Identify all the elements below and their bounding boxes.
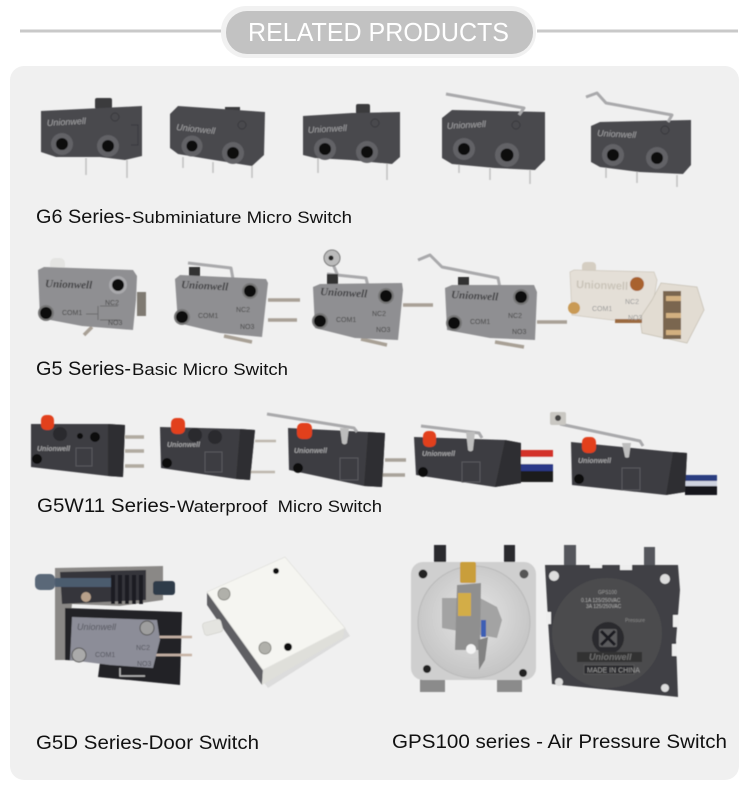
switch: G5 pin plunger: NC2: [105, 300, 119, 307]
switch: G5 roller lever: [312, 250, 433, 345]
switch: G5 pin plunger: COM1: [62, 310, 82, 317]
switch: G5W11 with wires: [414, 426, 553, 487]
switch: G5W11 roller lever with wires: [550, 412, 717, 495]
switch: G5W11 angled: [160, 418, 276, 480]
label: subminiature micro switch: Subminiature Micro Switch: [132, 208, 352, 227]
switch: G5 short lever: NC2: [236, 307, 250, 314]
switch: G6 straight lever: [442, 94, 545, 184]
product: G5D door switch mechanism: NO3: [137, 661, 152, 668]
switch: G6 solder terminals: Unionwell: [308, 123, 348, 135]
row: G5W11 series waterproof micro switches: [31, 412, 717, 495]
label: basic micro switch: Basic Micro Switch: [132, 360, 288, 379]
switch: G5 curved lever: NO3: [512, 329, 526, 336]
switch: G5W11 with wires: Unionwell: [422, 451, 456, 458]
switch: G5W11 roller lever with wires: Unionwell: [578, 458, 612, 465]
switch: G5 roller lever: NC2: [372, 311, 386, 318]
switch: G5 roller lever: COM1: [336, 317, 356, 324]
switch: G5 pin plunger: [38, 258, 146, 335]
switch: G5 short lever: COM1: [198, 313, 218, 320]
product: air pressure switch back: 3A 125/250VAC: [586, 604, 622, 610]
switch: G6 curved lever: Unionwell: [597, 128, 637, 140]
header: related products: [20, 6, 738, 58]
switch: G5 curved lever: COM1: [470, 319, 490, 326]
product: air pressure switch back: Pressure: [625, 618, 645, 624]
label: G5D series door switch: G5D Series-Door Switch: [36, 733, 259, 754]
switch: G5 white with connector: NO3: [628, 315, 642, 322]
product: G5D door switch mechanism: COM1: [95, 652, 115, 659]
switch: G5W11 angled: Unionwell: [167, 442, 201, 449]
switch: G5 pin plunger: NO3: [108, 320, 122, 327]
header: related products: RELATED PRODUCTS: [248, 17, 509, 47]
switch: G5 short lever: Unionwell: [181, 279, 229, 294]
label: GPS100 series air pressure switch: GPS100 series - Air Pressure Switch: [392, 732, 727, 753]
switch: G5 curved lever: [418, 255, 567, 347]
switch: G5W11 straight lever: Unionwell: [294, 448, 328, 455]
switch: G6 straight lever: Unionwell: [447, 119, 487, 131]
product: white door switch box: [202, 557, 350, 688]
label: waterproof micro switch: Waterproof Micro Switch: [177, 497, 382, 516]
switch: G5W11 plain: Unionwell: [37, 446, 71, 453]
switch: G5 white with connector: NC2: [625, 299, 639, 306]
product: G5D door switch mechanism: [35, 566, 192, 685]
switch: G5W11 plain: [31, 415, 144, 477]
switch: G6 angled: Unionwell: [176, 122, 217, 136]
switch: G5 roller lever: Unionwell: [320, 286, 368, 301]
switch: G5 roller lever: NO3: [376, 327, 390, 334]
row: G5 series basic micro switches: [38, 250, 704, 347]
switch: G6 plain actuator: [41, 98, 142, 178]
switch: G5 white with connector: Unionwell: [576, 279, 628, 293]
product: air pressure switch back: Unionwell: [589, 652, 632, 662]
label: G5 series: G5 Series-: [36, 359, 131, 380]
label: G5W11 series: G5W11 Series-: [37, 496, 176, 517]
switch: G5W11 straight lever: [267, 414, 406, 487]
product: G5D door switch mechanism: NC2: [136, 645, 150, 652]
product: air pressure switch back: MADE IN CHINA: [587, 668, 640, 674]
label: G6 series: G6 Series-: [36, 207, 131, 228]
product: air pressure switch back: [545, 545, 680, 697]
switch: G5 white with connector: COM1: [592, 306, 612, 313]
switch: G5 white with connector: [568, 262, 704, 343]
switch: G6 solder terminals: [303, 104, 400, 180]
switch: G5 short lever: [174, 263, 300, 342]
product: air pressure switch front: [411, 545, 536, 692]
switch: G5 curved lever: NC2: [508, 313, 522, 320]
switch: G5 curved lever: Unionwell: [451, 289, 499, 304]
switch: G5 short lever: NO3: [240, 324, 254, 331]
switch: G6 angled: [170, 106, 265, 178]
product: G5D door switch mechanism: Unionwell: [77, 622, 117, 632]
product: air pressure switch back: GPS100: [598, 590, 617, 596]
row: door switches: [35, 545, 680, 697]
switch: G5 pin plunger: Unionwell: [45, 278, 93, 292]
product: air pressure switch back: 0.1A 125/250VAC: [581, 598, 621, 604]
row: G6 series subminiature micro switches: [41, 93, 691, 187]
switch: G6 plain actuator: Unionwell: [47, 116, 87, 128]
switch: G6 curved lever: [586, 93, 691, 187]
